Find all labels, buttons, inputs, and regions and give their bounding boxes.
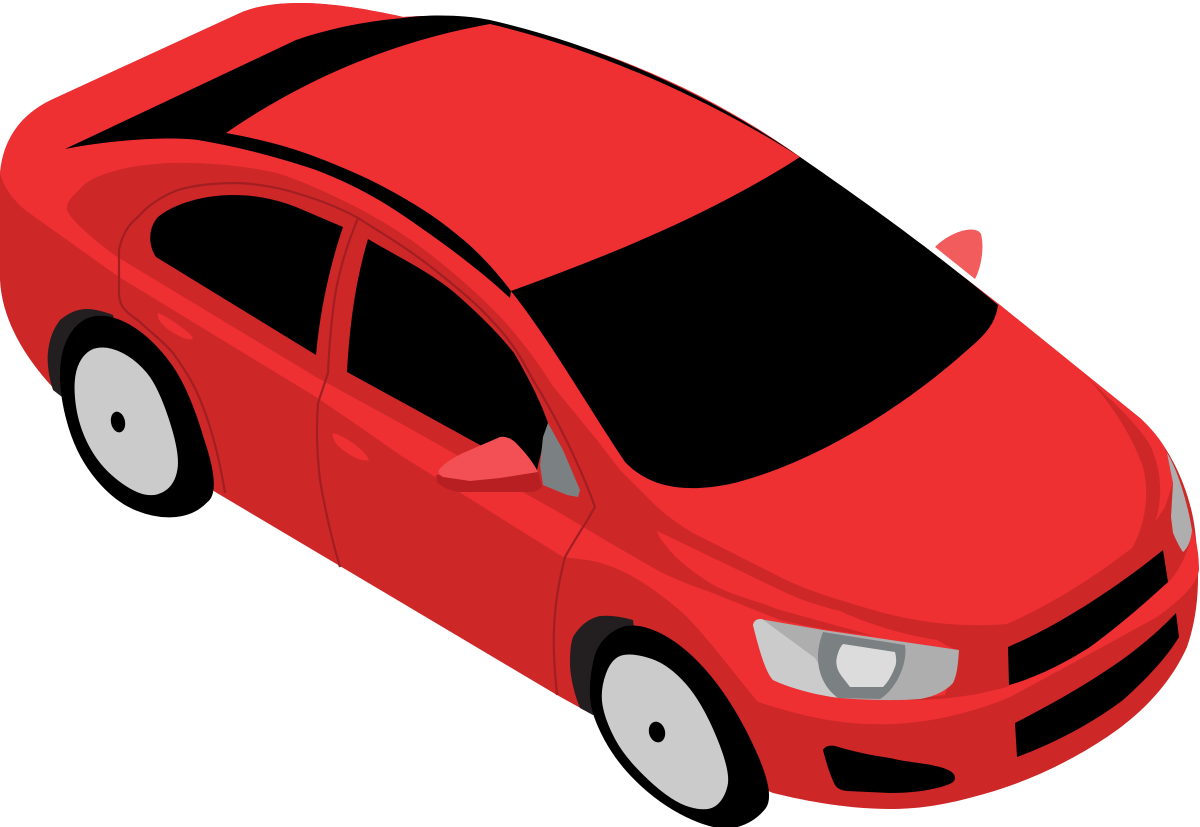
lens housing bbox=[753, 619, 959, 700]
far headlight bbox=[1167, 453, 1192, 552]
mirror face bbox=[439, 437, 538, 481]
rear handle bbox=[158, 313, 193, 339]
front grille bbox=[823, 550, 1179, 793]
bulb bbox=[836, 644, 896, 687]
rim bbox=[75, 348, 178, 495]
hood crease sliver bbox=[657, 531, 937, 641]
beltline highlight and front fender bbox=[0, 173, 1199, 724]
door handles bbox=[158, 313, 369, 461]
front handle bbox=[333, 433, 369, 461]
door frame lines bbox=[119, 183, 595, 695]
rear wheel bbox=[48, 309, 214, 517]
roof and windshield glass bbox=[65, 16, 998, 695]
fog lamp bbox=[823, 746, 955, 793]
front wheel bbox=[570, 616, 769, 827]
rim bbox=[602, 654, 728, 809]
wheel arch bbox=[570, 616, 640, 715]
rear side window bbox=[150, 195, 343, 355]
hub bbox=[647, 720, 667, 744]
headlight bbox=[753, 619, 959, 700]
small vent window bbox=[540, 423, 580, 497]
front side window bbox=[347, 239, 548, 470]
roof panel bbox=[226, 24, 800, 291]
tyre bbox=[590, 626, 769, 827]
middle door pillar line bbox=[317, 218, 358, 567]
front windshield bbox=[511, 157, 998, 488]
hub bbox=[109, 410, 127, 434]
tyre bbox=[60, 316, 214, 517]
wheel arch bbox=[48, 309, 120, 397]
bulb ring bbox=[818, 632, 905, 699]
bright upper body, roof and hood bbox=[0, 3, 1173, 625]
side mirror bbox=[436, 437, 542, 492]
far side mirror bbox=[935, 230, 982, 279]
hood side crescent bbox=[1080, 370, 1160, 548]
upper grille bbox=[1008, 550, 1168, 685]
lens light panel bbox=[753, 619, 840, 698]
lower grille bbox=[1015, 613, 1179, 757]
mirror base bbox=[436, 472, 542, 492]
rear windshield and roof rail bbox=[65, 16, 800, 298]
